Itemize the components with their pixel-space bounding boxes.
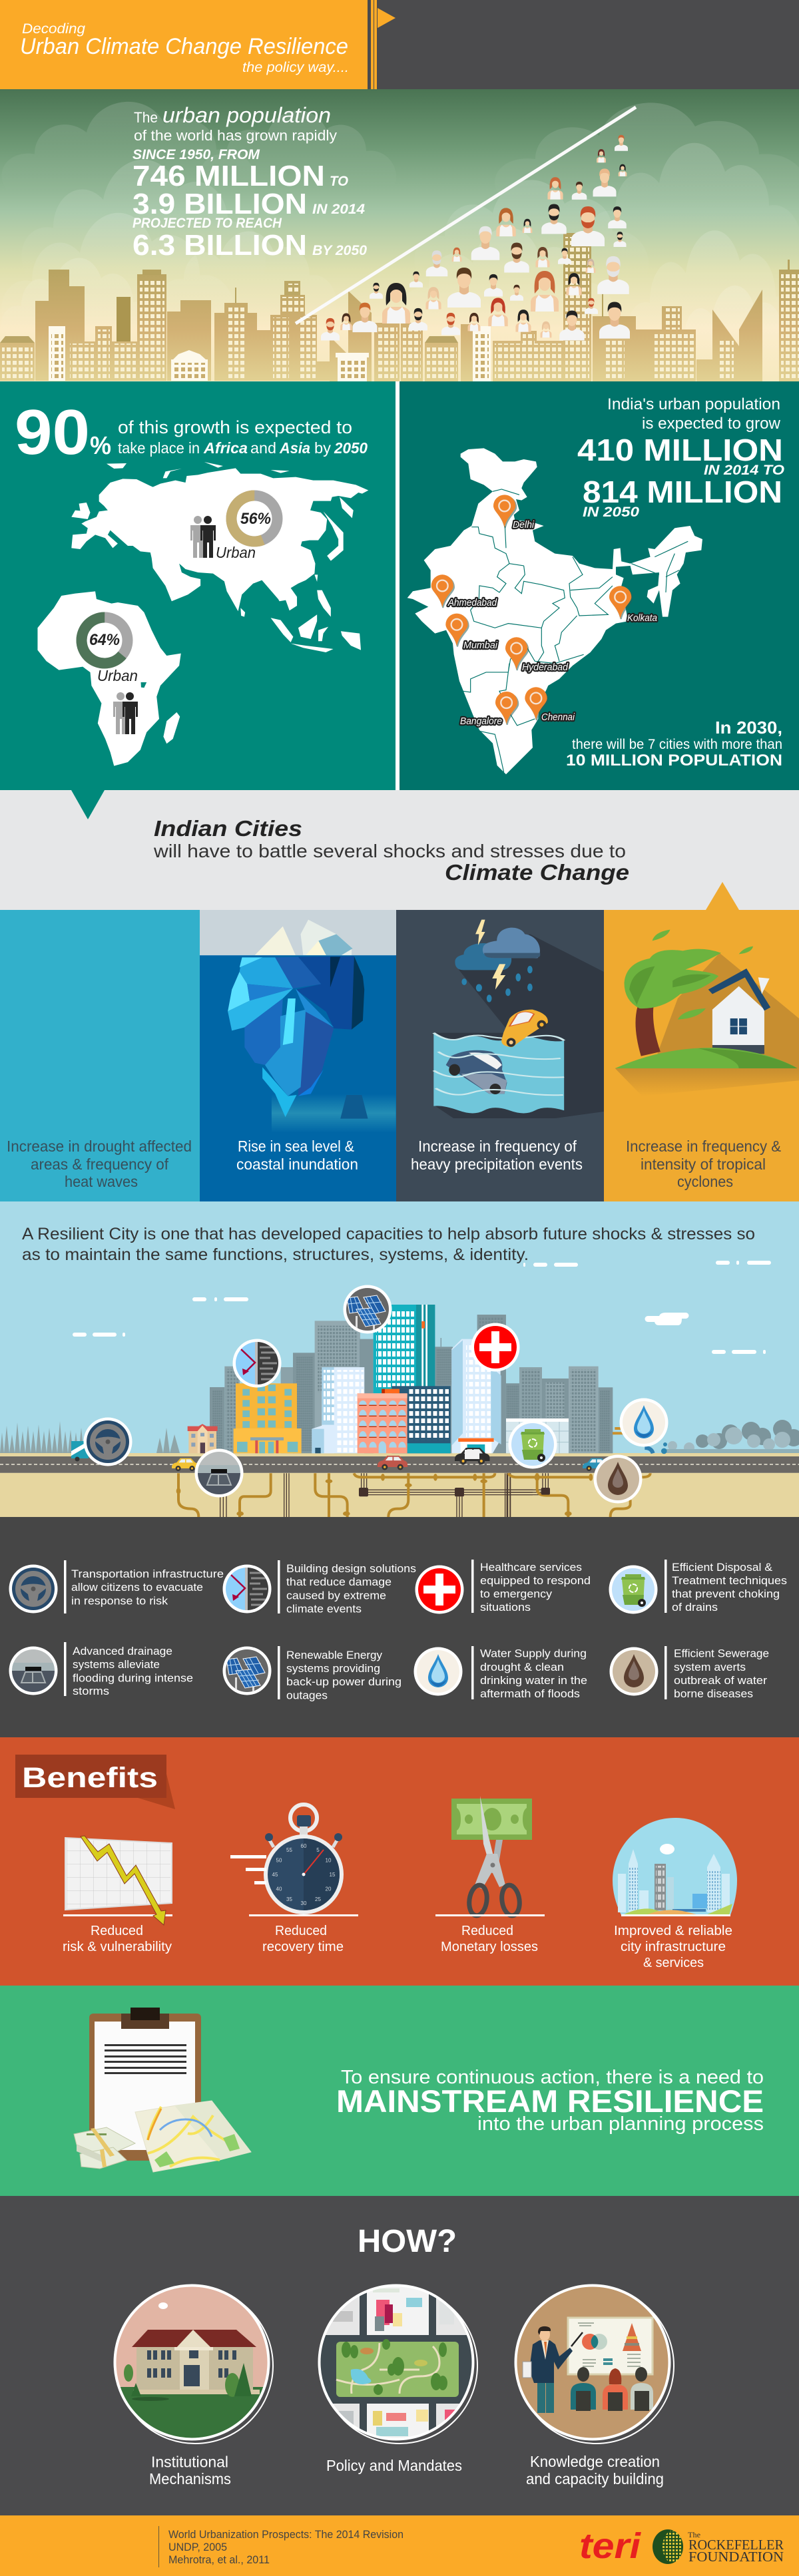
benefit: reduced recovery time: 20	[326, 1886, 332, 1892]
panel: drought: Increase in drought affected	[7, 1138, 192, 1155]
city labels: Chennai	[541, 712, 575, 723]
city labels: Mumbai	[463, 640, 498, 651]
towers with windows	[0, 233, 799, 381]
benefit: reduced monetary losses: Monetary losses	[441, 1940, 538, 1954]
measure: water supply: drought & clean	[480, 1661, 564, 1673]
measure: renewable energy: Renewable Energy	[286, 1649, 382, 1661]
logo: Rockefeller Foundation	[653, 2529, 784, 2565]
measure: healthcare: equipped to respond	[480, 1574, 591, 1587]
title text: Decoding	[22, 21, 85, 37]
panel: Indian cities statement	[0, 790, 799, 910]
mainstream text: into the urban planning process	[477, 2113, 764, 2135]
benefit: reduced recovery time: 40	[276, 1886, 282, 1892]
circle: institutional mechanisms	[113, 2283, 273, 2487]
benefit: reduced recovery time: 25	[315, 1896, 321, 1902]
donut chart: Asia 56% urban	[190, 489, 284, 561]
measure: transportation: allow citizens to evacuate	[71, 1581, 203, 1594]
city labels: Ahmedabad	[447, 598, 497, 608]
India text top	[577, 395, 784, 520]
heading 90 percent: 90	[15, 397, 90, 468]
city labels: Delhi	[513, 520, 535, 531]
title text: the policy way....	[242, 60, 349, 75]
benefit: reduced risk: risk & vulnerability	[63, 1940, 172, 1954]
hero text: 3.9 BILLION	[133, 188, 307, 220]
hero text: IN 2014	[312, 202, 365, 217]
panel: drought	[0, 910, 200, 1201]
benefit: reduced recovery time: 5	[316, 1847, 320, 1853]
benefit: reduced recovery time: 50	[276, 1857, 282, 1864]
hero text: BY 2050	[312, 243, 367, 258]
benefit: improved city infrastructure: & services	[643, 1956, 704, 1970]
circle: institutional mechanisms: Institutional	[151, 2454, 228, 2471]
India text top: is expected to grow	[642, 415, 781, 433]
circle: institutional mechanisms: Mechanisms	[149, 2470, 231, 2487]
donut chart: Africa 64% urban: 64%	[89, 631, 120, 649]
panel: benefits	[0, 1737, 799, 1986]
India text bottom: In 2030,	[715, 718, 782, 738]
measure: building design: Building design solutions	[286, 1562, 416, 1575]
benefit: improved city infrastructure: city infrastructure	[621, 1940, 726, 1954]
heading 90 percent: and	[250, 439, 276, 457]
measure: transportation: in response to risk	[71, 1595, 168, 1607]
measure: water supply: Water Supply during	[480, 1647, 587, 1660]
benefit: reduced recovery time: 35	[286, 1896, 292, 1902]
measure: healthcare: to emergency	[480, 1588, 553, 1600]
panel: India urban population	[400, 381, 799, 790]
heading 90 percent	[15, 397, 368, 468]
measure: disposal: Efficient Disposal &	[672, 1561, 773, 1574]
vehicles	[71, 1441, 609, 1471]
panel: cyclones	[604, 910, 799, 1201]
heading 90 percent: by	[314, 439, 332, 457]
city labels: Kolkata	[627, 613, 657, 624]
panel: sea level: coastal inundation	[236, 1156, 358, 1173]
measure: disposal: of drains	[672, 1601, 718, 1613]
panel: Indian cities statement: Indian Cities	[154, 816, 302, 841]
benefits heading	[15, 1755, 175, 1809]
measure: sewerage	[610, 1646, 769, 1700]
title text: Urban Climate Change Resilience	[20, 34, 348, 59]
panel: precipitation: Increase in frequency of	[418, 1138, 577, 1155]
panel: mainstream resilience	[0, 1986, 799, 2196]
donut chart: Asia 56% urban: Urban	[216, 544, 256, 561]
measure: drainage: systems alleviate	[73, 1658, 160, 1671]
benefit: reduced recovery time: Reduced	[275, 1924, 327, 1938]
India text top: 814 MILLION	[583, 475, 782, 509]
map: Africa	[37, 591, 181, 766]
icon: wind-bent tree and house	[615, 930, 799, 1096]
city labels: Bangalore	[460, 716, 502, 727]
donut chart: Africa 64% urban: Urban	[97, 667, 138, 684]
growth line	[296, 107, 636, 323]
logo: Rockefeller Foundation: ROCKEFELLER	[688, 2537, 784, 2553]
benefit: reduced recovery time: 10	[326, 1857, 332, 1864]
measure: water supply: aftermath of floods	[480, 1687, 580, 1700]
circle: knowledge creation	[513, 2283, 674, 2487]
hero text	[133, 103, 367, 262]
city pins	[431, 495, 633, 725]
logo: Rockefeller Foundation: The	[688, 2530, 700, 2539]
benefits heading: Benefits	[22, 1762, 158, 1794]
mainstream text: MAINSTREAM RESILIENCE	[336, 2083, 764, 2119]
benefit: reduced monetary losses: Reduced	[461, 1924, 513, 1938]
India text top: 410 MILLION	[577, 433, 783, 467]
panel: cyclones: cyclones	[677, 1173, 733, 1190]
logo: teri: teri	[579, 2526, 641, 2566]
circle: knowledge creation: Knowledge creation	[530, 2453, 660, 2470]
measure: building design: climate events	[286, 1603, 362, 1615]
benefit: reduced recovery time: recovery time	[262, 1940, 344, 1954]
definition text: A Resilient City is one that has developed capacities to help absorb future shocks & stresses so	[22, 1225, 755, 1243]
heading 90 percent: %	[90, 432, 111, 460]
measure: building design: that reduce damage	[286, 1576, 392, 1588]
measure: sewerage: system averts	[674, 1661, 746, 1673]
sources text: Mehrotra, et al., 2011	[168, 2553, 270, 2566]
panel: hero urban population	[0, 89, 799, 381]
circle: knowledge creation: and capacity building	[526, 2470, 664, 2487]
measure: building design: caused by extreme	[286, 1590, 386, 1602]
panel: cyclones: intensity of tropical	[641, 1156, 766, 1173]
mainstream text: To ensure continuous action, there is a need to	[341, 2067, 764, 2088]
road and ground	[0, 1453, 799, 1517]
panel: precipitation	[396, 910, 604, 1201]
hero text: PROJECTED TO REACH	[133, 216, 282, 231]
sources text: UNDP, 2005	[168, 2541, 227, 2553]
icon: clipboard, map and money	[74, 2008, 251, 2172]
donut chart: Africa 64% urban	[72, 608, 138, 734]
definition text	[22, 1225, 755, 1264]
measure: renewable energy: back-up power during	[286, 1675, 401, 1688]
measure: healthcare: Healthcare services	[480, 1561, 582, 1574]
people crowd	[321, 135, 630, 341]
measure: transportation	[9, 1560, 224, 1613]
heading 90 percent: of this growth is expected to	[118, 417, 352, 437]
city buildings	[188, 1305, 533, 1453]
measure: disposal: Treatment techniques	[672, 1574, 787, 1587]
benefit: reduced risk: Reduced	[91, 1924, 143, 1938]
measure: disposal: that prevent choking	[672, 1588, 780, 1600]
treelines	[0, 1420, 799, 1453]
India text bottom: there will be 7 cities with more than	[572, 737, 782, 752]
India text top: India's urban population	[607, 395, 780, 413]
panel: drought: areas & frequency of	[31, 1156, 169, 1173]
hero text: of the world has grown rapidly	[134, 127, 337, 144]
measure: disposal	[609, 1560, 787, 1613]
benefit: reduced recovery time: 30	[301, 1900, 307, 1906]
benefit: reduced recovery time: 15	[330, 1872, 336, 1878]
benefit: improved city infrastructure	[613, 1818, 737, 1970]
benefit: reduced recovery time: 55	[286, 1847, 292, 1853]
hero text: The	[134, 109, 158, 126]
circle: policy and mandates	[316, 2283, 477, 2474]
circle: policy and mandates: Policy and Mandates	[326, 2457, 462, 2474]
measure: renewable energy: outages	[286, 1689, 328, 1701]
city labels: Hyderabad	[522, 662, 569, 673]
India text top: IN 2050	[583, 505, 639, 520]
heading 90 percent: 2050	[334, 439, 368, 457]
icon markers	[84, 1285, 668, 1503]
benefit: reduced monetary losses	[435, 1796, 545, 1954]
India text bottom: 10 MILLION POPULATION	[566, 751, 782, 769]
logo: Rockefeller Foundation: FOUNDATION	[688, 2549, 784, 2565]
benefit: reduced recovery time: 45	[272, 1872, 278, 1878]
heading 90 percent: take place in	[118, 439, 200, 457]
hero text: 746 MILLION	[133, 160, 325, 192]
measure: renewable energy	[222, 1646, 401, 1701]
measure: drainage: Advanced drainage	[73, 1645, 172, 1657]
heading 90 percent: Africa	[203, 439, 248, 457]
measure: healthcare	[415, 1560, 591, 1613]
measure: drainage: flooding during intense	[73, 1672, 193, 1684]
measure: water supply: drinking water in the	[480, 1674, 587, 1687]
panel: sea level	[200, 910, 396, 1201]
how heading: HOW?	[358, 2224, 457, 2259]
measure: drainage: storms	[73, 1685, 109, 1697]
sources text: World Urbanization Prospects: The 2014 Revision	[168, 2528, 403, 2541]
panel: Indian cities statement: Climate Change	[445, 860, 629, 885]
benefit: reduced risk	[63, 1836, 172, 1954]
panel: Indian cities statement: will have to battle several shocks and stresses due to	[153, 841, 626, 861]
heading 90 percent: Asia	[279, 439, 310, 457]
header banner	[0, 0, 799, 89]
panel: resilience measures list	[0, 1517, 799, 1737]
benefit: improved city infrastructure: Improved & reliable	[614, 1924, 732, 1938]
panel: precipitation: heavy precipitation events	[411, 1156, 583, 1173]
definition text: as to maintain the same functions, structures, systems, & identity.	[22, 1245, 529, 1264]
measure: water supply	[414, 1646, 587, 1700]
measure: sewerage: borne diseases	[674, 1687, 753, 1700]
sky clouds	[73, 1261, 771, 1354]
measure: renewable energy: systems providing	[286, 1662, 380, 1675]
measure: building design	[222, 1560, 416, 1615]
India text top: IN 2014 TO	[704, 463, 784, 478]
measure: sewerage: Efficient Sewerage	[674, 1647, 769, 1660]
India text bottom	[566, 718, 782, 769]
hero skyline	[0, 233, 799, 381]
measure: sewerage: outbreak of water	[674, 1674, 767, 1687]
measure: transportation: Transportation infrastructure	[71, 1568, 224, 1580]
icon: storm and flooded cars	[433, 920, 604, 1118]
hero text: TO	[330, 174, 348, 189]
panel: global growth Africa Asia	[0, 381, 400, 790]
panel: cyclones: Increase in frequency &	[626, 1138, 781, 1155]
panel: how	[113, 2229, 674, 2487]
panel: drought: heat waves	[65, 1173, 138, 1190]
map: Eurasia	[71, 462, 368, 652]
measure: drainage	[9, 1642, 193, 1697]
hero text: SINCE 1950, FROM	[133, 147, 260, 162]
underground pipes right	[506, 1473, 651, 1517]
title text	[20, 21, 349, 75]
panel: resilient city illustration	[0, 1201, 799, 1517]
hero text: 6.3 BILLION	[133, 229, 307, 262]
benefit: reduced recovery time	[230, 1805, 358, 1954]
benefit: reduced recovery time: 60	[301, 1843, 307, 1849]
donut chart: Asia 56% urban: 56%	[240, 510, 271, 528]
icon: iceberg	[200, 920, 396, 1133]
panel: sea level: Rise in sea level &	[238, 1138, 354, 1155]
footer	[0, 2515, 799, 2576]
mainstream text	[336, 2067, 764, 2135]
sources text	[168, 2528, 403, 2566]
city buildings right	[506, 1367, 667, 1454]
India map	[407, 448, 702, 774]
city labels	[447, 520, 657, 727]
measure: healthcare: situations	[480, 1601, 531, 1613]
underground pipes	[176, 1473, 533, 1517]
hero text: urban population	[162, 103, 331, 127]
